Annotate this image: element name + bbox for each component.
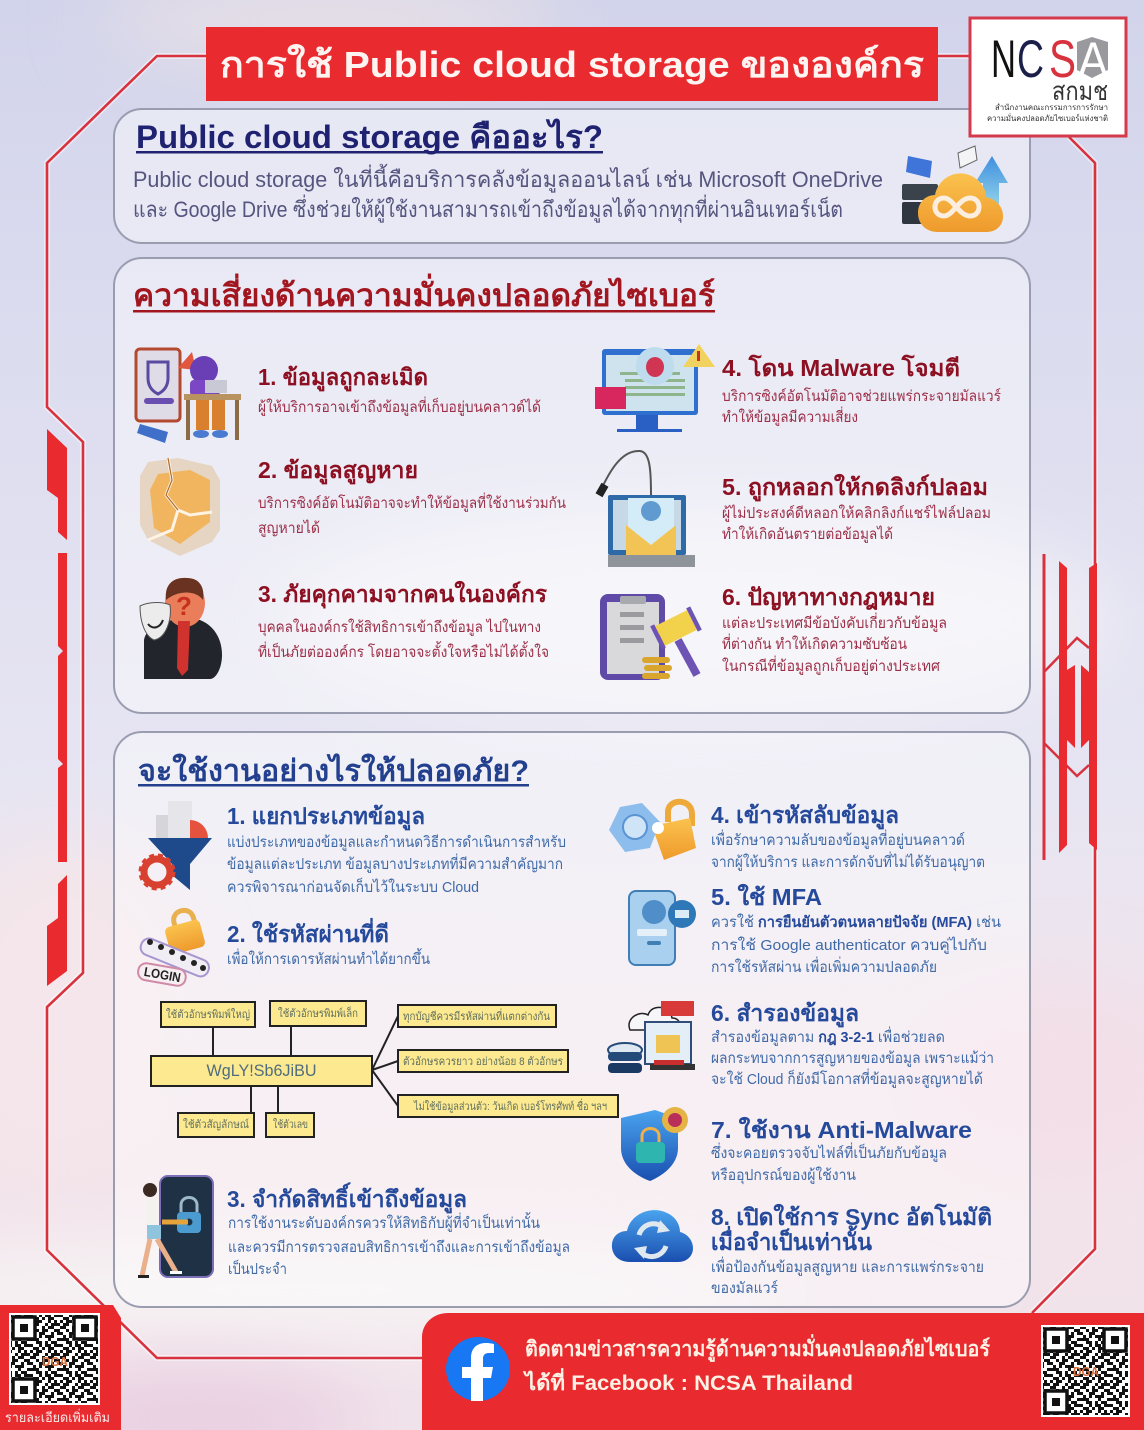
footer text: ติดตามข่าวสารความรู้ด้านความมั่นคงปลอดภัยไซเบอร์ [525,1333,991,1363]
risk 6 text [722,584,947,675]
risk 4 text: 4. โดน Malware โจมตี [722,354,960,381]
NCSA logo: สกมช [1052,76,1108,106]
safe 7 text: ซึ่งจะคอยตรวจจับไฟล์ที่เป็นภัยกับข้อมูล [711,1142,947,1162]
safe 8 text: ของมัลแวร์ [711,1280,778,1297]
safe 2 text: เพื่อให้การเดารหัสผ่านทำได้ยากขึ้น [227,948,430,968]
safe 1 text: ข้อมูลแต่ละประเภท ข้อมูลบางประเภทที่มีความสำคัญมาก [227,853,563,873]
risk 4 text: ทำให้ข้อมูลมีความเสี่ยง [722,406,858,426]
footer facebook block [422,1313,1144,1430]
safe 8 text: เมื่อจำเป็นเท่านั้น [711,1225,872,1255]
risk 4 text [722,354,1001,426]
risk 3 text: 3. ภัยคุกคามจากคนในองค์กร [258,580,548,609]
password example box [151,1056,372,1086]
safe 4 text: 4. เข้ารหัสลับข้อมูล [711,802,899,830]
risk 1 text: 1. ข้อมูลถูกละเมิด [258,364,428,392]
risk 3 text: ที่เป็นภัยต่อองค์กร โดยอาจจะตั้งใจหรือไม่ได้ตั้งใจ [258,641,549,661]
QR caption: รายละเอียดเพิ่มเติม [5,1409,110,1425]
safe 1 text: แบ่งประเภทของข้อมูลและกำหนดวิธีการดำเนินการสำหรับ [227,834,566,851]
heading: what is public cloud storage: Public cloud storage คืออะไร? [136,118,603,155]
safe 6 text: จะใช้ Cloud ก็ยังมีโอกาสที่ข้อมูลจะสูญหายได้ [711,1068,983,1088]
safe 3 text: และควรมีการตรวจสอบสิทธิการเข้าถึงและการเข้าถึงข้อมูล [228,1239,570,1256]
risk 2 text [258,457,566,537]
safe 2 text: 2. ใช้รหัสผ่านที่ดี [227,917,389,947]
heading: cyber security risks: ความเสี่ยงด้านความมั่นคงปลอดภัยไซเบอร์ [133,273,715,313]
safe 8 text: เพื่อป้องกันข้อมูลสูญหาย และการแพร่กระจาย [711,1256,984,1276]
icon: cracked shield [140,458,220,556]
icon: login password [137,908,211,987]
safe 7 text [711,1116,972,1185]
icon: girl unlocking phone [138,1176,213,1278]
safe 8 text [711,1203,992,1297]
rule: digit: ใช้ตัวเลข [273,1118,308,1131]
risk 1 text: ผู้ให้บริการอาจเข้าถึงข้อมูลที่เก็บอยู่บนคลาวด์ได้ [258,396,541,416]
safe 5 text: การใช้รหัสผ่าน เพื่อเพิ่มความปลอดภัย [711,956,937,976]
safe 4 text: จากผู้ให้บริการ และการดักจับที่ไม่ได้รับอนุญาต [711,851,985,872]
safe 8 text: 8. เปิดใช้การ Sync อัตโนมัติ [711,1203,992,1230]
heading: how to use safely: จะใช้งานอย่างไรให้ปลอดภัย? [138,753,529,788]
safe 5 text: การใช้ Google authenticator ควบคู่ไปกับ [711,936,987,954]
safe 5 text: 5. ใช้ MFA [711,883,822,910]
safe 3 text: การใช้งานระดับองค์กรควรให้สิทธิกับผู้ที่จำเป็นเท่านั้น [228,1212,540,1232]
risk 2 text: 2. ข้อมูลสูญหาย [258,457,418,485]
text block: definition [133,164,883,223]
rule: symbol: ใช้ตัวสัญลักษณ์ [183,1118,249,1131]
risk 5 text: ผู้ไม่ประสงค์ดีหลอกให้คลิกลิงก์แชร์ไฟล์ปลอม [722,504,991,522]
safe 1 text: ควรพิจารณาก่อนจัดเก็บไว้ในระบบ Cloud [227,877,479,896]
safe 7 text: หรืออุปกรณ์ของผู้ใช้งาน [711,1166,856,1185]
title banner: การใช้ Public cloud storage ขององค์กร [220,43,925,85]
QR code: more details: DGA [42,1354,69,1369]
left QR block [0,1305,121,1430]
left red side bars [47,429,67,986]
rule: unique per account: ทุกบัญชีควรมีรหัสผ่านที่แตกต่างกัน [403,1008,550,1023]
safe 6 text: สำรองข้อมูลตาม กฎ 3-2-1 เพื่อช่วยลด [711,1026,945,1046]
safe 1 text [227,803,566,896]
rule: minimum length: ตัวอักษรควรยาว อย่างน้อย 8 ตัวอักษร [403,1056,563,1068]
panel: how to use safely [114,732,1030,1307]
risk 6 text: ที่ต่างกัน ทำให้เกิดความซับซ้อน [722,633,907,653]
text block: definition: Public cloud storage ในที่นี้คือบริการคลังข้อมูลออนไลน์ เช่น Microsoft OneDrive [133,164,883,193]
icon: funnel classify [140,801,212,890]
safe 7 text: 7. ใช้งาน Anti-Malware [711,1116,972,1143]
safe 4 text [711,802,985,872]
QR code: facebook: DGA [1073,1364,1100,1379]
icon: facebook [446,1337,510,1401]
risk 2 text: สูญหายได้ [258,519,320,537]
risk 6 text: ในกรณีที่ข้อมูลถูกเก็บอยู่ต่างประเทศ [722,655,940,675]
icon: insider with mask: ? [176,591,192,621]
safe 6 text: 6. สำรองข้อมูล [711,1000,859,1028]
footer text: ได้ที่ Facebook : NCSA Thailand [523,1367,853,1395]
safe 3 text: เป็นประจำ [228,1259,287,1278]
right red side bars and arrows [1044,554,1097,860]
icon: phishing rod and envelope [596,451,695,567]
rule: no personal data: ไม่ใช้ข้อมูลส่วนตัว: วันเกิด เบอร์โทรศัพท์ ชื่อ ฯลฯ [413,1098,607,1113]
NCSA logo: C [1017,30,1044,89]
icon: data breach hacker [136,349,241,443]
panel: cyber security risks [114,258,1030,713]
footer text [523,1333,991,1395]
icon: anti-malware shield [621,1107,688,1181]
password example box: WgLY!Sb6JiBU [206,1061,316,1080]
text block: definition: และ Google Drive ซึ่งช่วยให้ผู้ใช้งานสามารถเข้าถึงข้อมูลได้จากทุกที่ผ่านอินเทอร์เน็ต [133,194,843,223]
risk 6 text: แต่ละประเทศมีข้อบังคับเกี่ยวกับข้อมูล [722,612,947,632]
icon: infinity cloud [902,146,1008,232]
NCSA logo: ความมั่นคงปลอดภัยไซเบอร์แห่งชาติ [987,112,1108,123]
safe 3 text: 3. จำกัดสิทธิ์เข้าถึงข้อมูล [227,1182,467,1214]
NCSA logo [970,18,1126,136]
rule: lowercase: ใช้ตัวอักษรพิมพ์เล็ก [278,1006,358,1020]
icon: encryption lock [609,802,696,860]
risk 3 text [258,580,549,661]
safe 1 text: 1. แยกประเภทข้อมูล [227,803,425,831]
rule: unique per account [398,1005,556,1027]
risk 3 text: บุคคลในองค์กรใช้สิทธิการเข้าถึงข้อมูล ไปในทาง [258,618,541,637]
NCSA logo: A [1078,32,1109,88]
icon: malware monitor [595,344,715,432]
password diagram [151,1001,618,1137]
icon: backup storage [608,1001,695,1073]
icon: insider with mask [140,578,222,679]
risk 4 text: บริการซิงค์อัตโนมัติอาจช่วยแพร่กระจายมัลแวร์ [722,387,1001,405]
icon: login password: LOGIN [143,964,182,985]
risk 5 text: 5. ถูกหลอกให้กดลิงก์ปลอม [722,473,988,502]
risk 6 text: 6. ปัญหาทางกฎหมาย [722,584,935,611]
risk 1 text [258,364,541,416]
risk 2 text: บริการซิงค์อัตโนมัติอาจจะทำให้ข้อมูลที่ใช้งานร่วมกัน [258,492,566,512]
rule: symbol [178,1113,254,1137]
safe 3 text [227,1182,570,1278]
QR code: facebook [1041,1325,1130,1417]
risk 5 text [722,473,991,543]
icon: sync cloud [612,1210,693,1262]
rule: minimum length [398,1050,568,1072]
safe 5 text: ควรใช้ การยืนยันตัวตนหลายปัจจัย (MFA) เช่น [711,913,1001,931]
safe 5 text [711,883,1001,976]
panel: what is public cloud storage [114,109,1030,243]
title banner [206,27,938,101]
icon: legal clipboard and gavel [600,594,697,680]
icon: mfa phone [629,891,696,965]
safe 6 text: ผลกระทบจากการสูญหายของข้อมูล เพราะแม้ว่า [711,1050,994,1067]
risk 5 text: ทำให้เกิดอันตรายต่อข้อมูลได้ [722,525,893,543]
safe 4 text: เพื่อรักษาความลับของข้อมูลที่อยู่บนคลาวด์ [711,829,965,849]
NCSA logo: สำนักงานคณะกรรมการการรักษา [995,103,1108,112]
rule: uppercase: ใช้ตัวอักษรพิมพ์ใหญ่ [166,1008,250,1021]
safe 2 text [227,917,430,968]
rule: uppercase [161,1002,255,1027]
rule: lowercase [270,1001,366,1026]
NCSA logo: S [1049,30,1076,89]
safe 6 text [711,1000,994,1088]
NCSA logo: N [991,30,1016,89]
rule: digit [266,1113,314,1137]
rule: no personal data [398,1095,618,1117]
